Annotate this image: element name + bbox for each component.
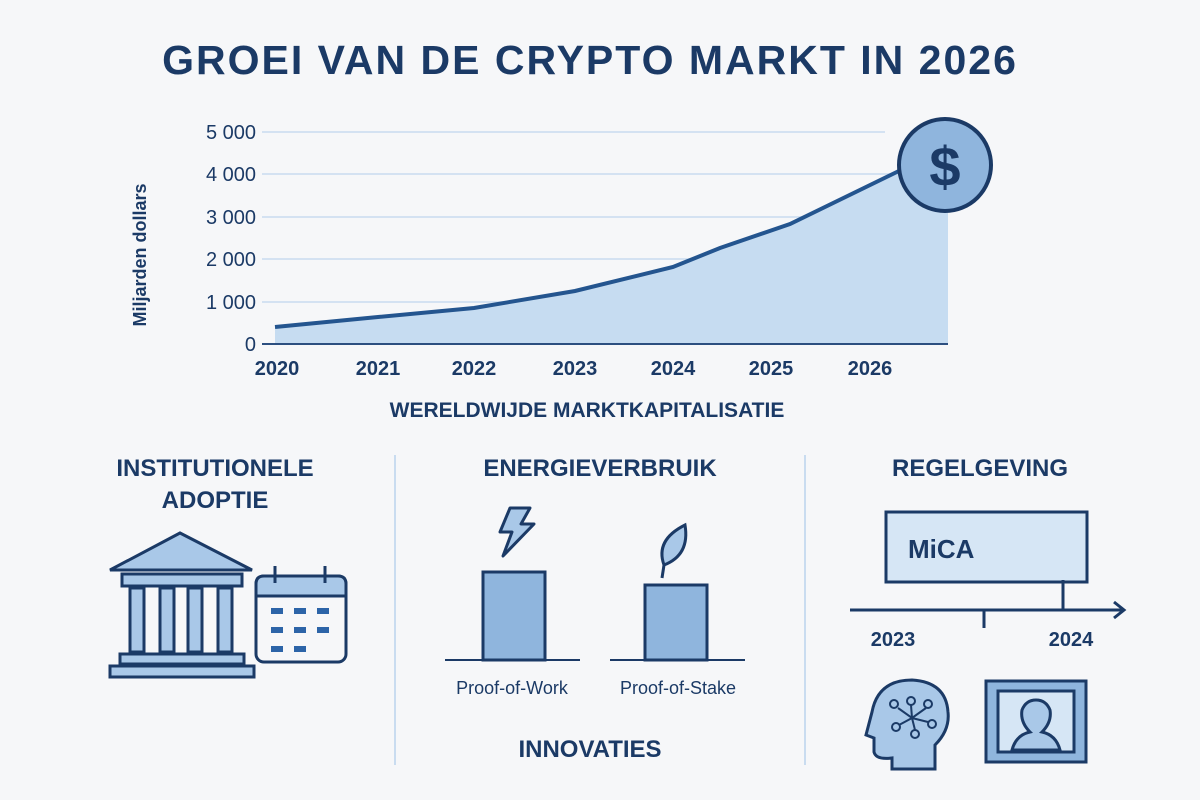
panel: institutionele adoptie: INSTITUTIONELE xyxy=(116,455,314,482)
icon: dollar coin xyxy=(899,119,991,211)
x axis labels: 2025 xyxy=(749,358,793,380)
title: GROEI VAN DE CRYPTO MARKT IN 2026 xyxy=(162,37,1018,83)
MiCA box xyxy=(886,512,1087,582)
y axis title: Miljarden dollars xyxy=(130,183,150,327)
panel: regelgeving: MiCA xyxy=(908,534,975,564)
heading: innovaties: INNOVATIES xyxy=(518,736,662,763)
icon: dollar coin: $ xyxy=(929,135,961,198)
x axis labels: 2022 xyxy=(452,358,496,380)
panel: regelgeving: 2024 xyxy=(1049,629,1094,651)
panel: energieverbruik xyxy=(445,455,745,698)
y axis labels: 1 000 xyxy=(206,292,256,314)
panel: regelgeving xyxy=(850,455,1124,769)
bar: proof-of-stake xyxy=(645,585,707,660)
y axis labels: 5 000 xyxy=(206,122,256,144)
icon: calendar xyxy=(256,566,346,662)
data line xyxy=(275,168,905,327)
y axis labels: 0 xyxy=(245,334,256,356)
chart subtitle: WERELDWIJDE MARKTKAPITALISATIE xyxy=(390,399,784,422)
y axis labels: 4 000 xyxy=(206,164,256,186)
panel: energieverbruik: Proof-of-Stake xyxy=(620,678,736,698)
panel: energieverbruik: Proof-of-Work xyxy=(456,678,569,698)
panel: regelgeving: 2023 xyxy=(871,629,915,651)
bar: proof-of-work xyxy=(483,572,545,660)
x axis labels xyxy=(255,358,892,380)
icon: leaf xyxy=(662,525,686,578)
icon: lightning xyxy=(500,508,534,556)
panel: energieverbruik: ENERGIEVERBRUIK xyxy=(483,455,717,482)
x axis labels: 2023 xyxy=(553,358,597,380)
icon: portrait frame xyxy=(986,681,1086,762)
area fill xyxy=(275,150,948,344)
panel: regelgeving: REGELGEVING xyxy=(892,455,1068,482)
timeline arrow xyxy=(850,580,1124,628)
x axis labels: 2021 xyxy=(356,358,400,380)
icon: bank xyxy=(110,533,254,677)
y axis labels: 3 000 xyxy=(206,207,256,229)
y axis labels xyxy=(206,122,256,356)
line chart: market cap xyxy=(130,119,991,380)
panel: institutionele adoptie xyxy=(110,455,346,677)
x axis labels: 2024 xyxy=(651,358,696,380)
x axis labels: 2026 xyxy=(848,358,892,380)
y axis labels: 2 000 xyxy=(206,249,256,271)
icon: AI head xyxy=(866,680,948,769)
x axis labels: 2020 xyxy=(255,358,299,380)
panel: institutionele adoptie: ADOPTIE xyxy=(162,487,268,514)
